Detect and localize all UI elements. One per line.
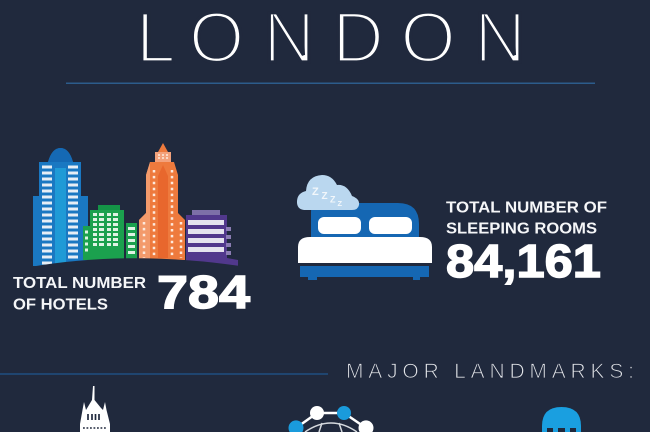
rooms number: 84,161	[446, 235, 601, 287]
purple building	[186, 210, 238, 266]
headboard	[311, 203, 419, 238]
snore letters: Z	[322, 191, 328, 202]
icon: blue domed landmark	[542, 407, 581, 432]
mattress	[298, 237, 432, 263]
snore letters: Z	[330, 194, 336, 204]
heading: major landmarks: MAJOR LANDMARKS:	[346, 360, 634, 383]
icon: hotel skyline	[30, 143, 240, 272]
pillows	[318, 217, 412, 234]
green building	[83, 205, 137, 260]
cloud	[297, 175, 359, 210]
icon: ferris wheel	[288, 406, 374, 432]
title: LONDON	[136, 0, 526, 78]
snore letters: Z	[312, 186, 319, 198]
ground arc	[30, 258, 240, 272]
hotels label: TOTAL NUMBER	[13, 275, 146, 292]
icon: bed with cloud	[297, 175, 607, 280]
bed base	[300, 266, 429, 280]
blue tower	[33, 148, 88, 268]
hotels number: 784	[157, 266, 251, 318]
hotels label: OF HOTELS	[13, 296, 108, 314]
icon: parliament	[80, 386, 110, 432]
rooms label: SLEEPING ROOMS	[446, 220, 597, 238]
orange tower	[139, 143, 185, 260]
rooms label: TOTAL NUMBER OF	[446, 200, 607, 216]
snore letters: Z	[338, 199, 342, 208]
